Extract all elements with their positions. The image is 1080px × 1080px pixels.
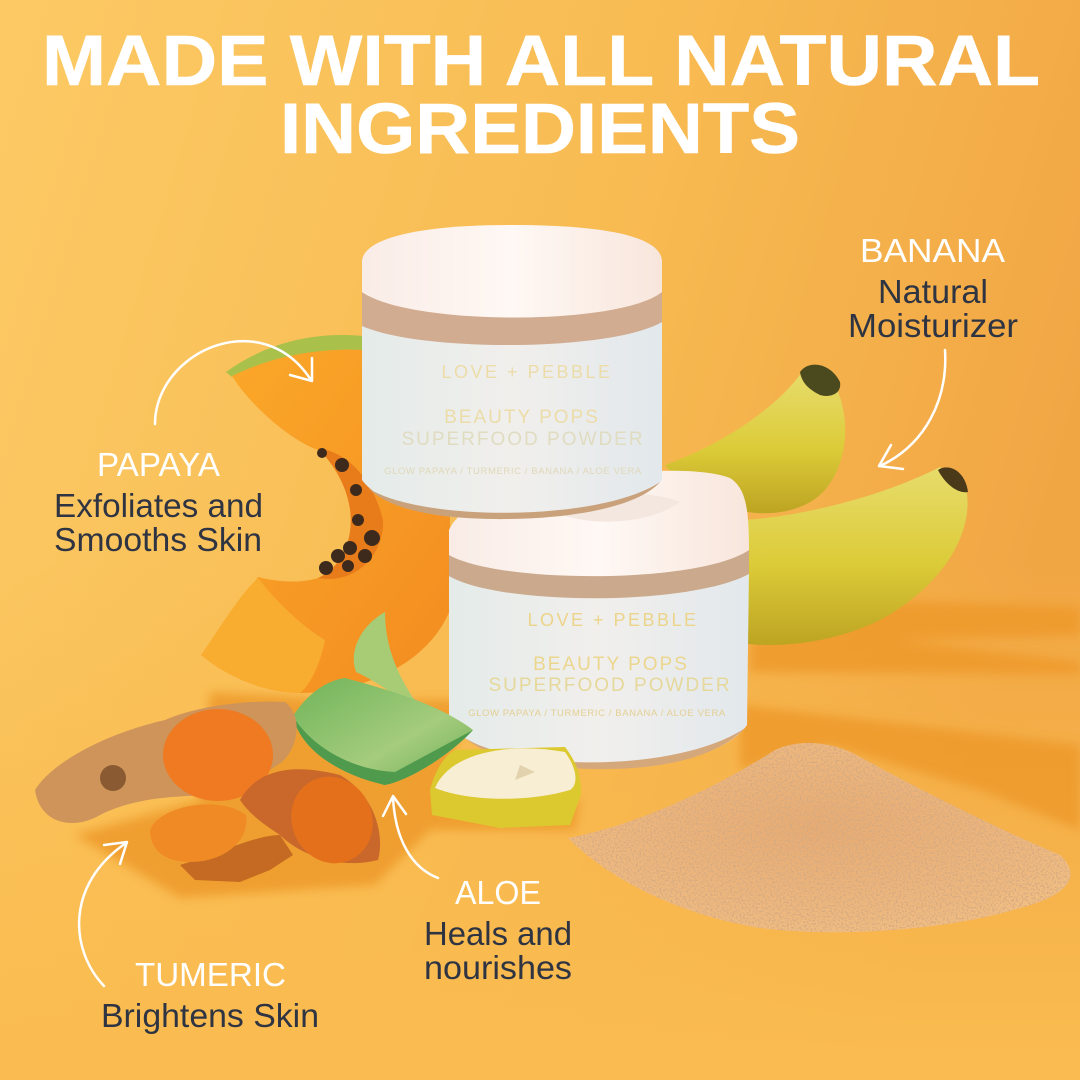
jar label text: GLOW PAPAYA / TURMERIC / BANANA / ALOE VERA [384, 466, 642, 477]
jar body [362, 320, 662, 519]
lower slices [180, 835, 293, 882]
cut face [163, 709, 273, 801]
aloe illustration [293, 612, 473, 785]
jar label text: SUPERFOOD POWDER [401, 429, 645, 450]
label: banana: Natural [878, 273, 988, 310]
jar: top [362, 225, 662, 519]
banana back [665, 372, 845, 513]
aloe upright piece [354, 612, 420, 708]
label: tumeric: Brightens Skin [101, 997, 319, 1034]
papaya flesh [201, 350, 450, 693]
floor tone [0, 560, 1080, 1080]
aloe leaf edge [293, 716, 473, 785]
label: aloe: Heals and [424, 915, 572, 952]
jar label text: LOVE + PEBBLE [527, 610, 699, 630]
label: tumeric [101, 957, 319, 1034]
jar lid [449, 471, 749, 576]
banana front [745, 467, 968, 645]
banana front tip [938, 467, 968, 492]
jar label text: LOVE + PEBBLE [441, 362, 613, 382]
papaya seeds [317, 448, 380, 575]
papaya inner cavity [318, 448, 383, 579]
jar label text [384, 362, 645, 477]
label: banana: BANANA [860, 233, 1006, 270]
jar label text [468, 610, 732, 719]
jar label text: BEAUTY POPS [533, 654, 689, 675]
label: banana: Moisturizer [848, 307, 1018, 344]
root body [35, 702, 297, 823]
label: aloe: nourishes [424, 949, 572, 986]
label: aloe: ALOE [455, 875, 541, 912]
papaya upper skin [226, 335, 362, 377]
banana slice [430, 747, 581, 828]
jar label text: SUPERFOOD POWDER [488, 675, 732, 696]
cast shadows [75, 600, 1080, 898]
jar label text: GLOW PAPAYA / TURMERIC / BANANA / ALOE VERA [468, 708, 726, 719]
title [42, 22, 1040, 169]
papaya illustration [201, 335, 450, 693]
powder pile [568, 743, 1071, 932]
arrow: aloe [383, 796, 438, 878]
papaya lower wedge [201, 578, 325, 693]
title: INGREDIENTS [280, 90, 800, 169]
jar: bottom [449, 471, 749, 769]
label: papaya: Exfoliates and [54, 487, 263, 524]
jar body [449, 570, 749, 768]
jar label text: BEAUTY POPS [444, 407, 600, 428]
turmeric illustration [35, 702, 387, 882]
title: MADE WITH ALL NATURAL [42, 22, 1040, 101]
label: banana [848, 233, 1018, 344]
label: papaya: Smooths Skin [54, 521, 262, 558]
arrow: tumeric [79, 842, 127, 986]
banana back tip [800, 365, 840, 396]
label: tumeric: TUMERIC [135, 957, 286, 994]
label: papaya [54, 447, 263, 558]
label: aloe [424, 875, 572, 986]
arrow: papaya [155, 341, 312, 424]
arrow: banana [879, 350, 945, 469]
banana illustration [665, 365, 968, 645]
label: papaya: PAPAYA [97, 447, 221, 484]
aloe leaf [293, 678, 473, 785]
right root [240, 769, 380, 863]
jar lid [362, 225, 662, 318]
